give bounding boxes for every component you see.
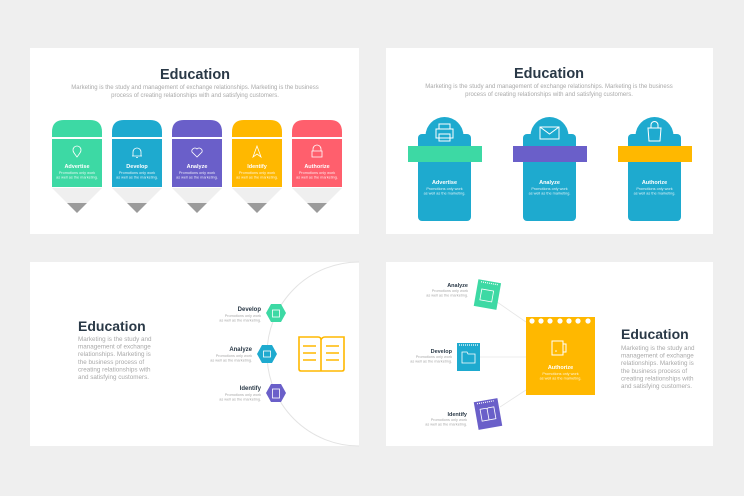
panel: rulers <box>386 48 713 234</box>
paragraph: the business process of <box>621 368 687 375</box>
pencil: Analyze: as well as the marketing. <box>176 176 218 180</box>
pencil: Authorize: Authorize <box>304 164 330 170</box>
column: Authorize <box>618 117 692 221</box>
title: Education <box>78 318 146 334</box>
pencil: Authorize: as well as the marketing. <box>296 176 338 180</box>
pencil: Advertise: Promotions only work <box>59 171 95 175</box>
pencil: Analyze: Analyze <box>187 164 207 170</box>
pencil: Identify: Promotions only work <box>239 171 275 175</box>
item: Analyze <box>210 345 277 363</box>
note: Develop: Develop <box>431 349 453 355</box>
column: Advertise: Promotions only work <box>426 187 463 191</box>
subtitle: Marketing is the study and management of exchange relationships. Marketing is the business <box>71 85 319 91</box>
item: Develop: Develop <box>238 307 261 313</box>
central note: Authorize: Authorize <box>548 365 573 371</box>
column: Advertise <box>408 117 482 221</box>
paragraph: the business process of <box>78 359 144 366</box>
column: Analyze: as well as the marketing. <box>529 192 570 196</box>
subtitle: Marketing is the study and management of exchange relationships. Marketing is the business <box>425 84 673 90</box>
pencil: Develop: Promotions only work <box>119 171 155 175</box>
pencil: Analyze: Promotions only work <box>179 171 215 175</box>
pencil: Authorize: Promotions only work <box>299 171 335 175</box>
paragraph: management of exchange <box>78 344 151 351</box>
paragraph: Marketing is the study and <box>621 345 695 352</box>
column: Authorize: Authorize <box>642 180 667 186</box>
item: Identify: Identify <box>240 386 262 392</box>
panel: notepads <box>386 262 713 446</box>
title: Education <box>160 67 230 83</box>
paragraph: and satisfying customers. <box>78 374 149 381</box>
pencil: Authorize <box>292 120 342 213</box>
pencil: Identify: Identify <box>247 164 268 170</box>
item: Analyze: as well as the marketing. <box>210 359 252 363</box>
item: Develop: as well as the marketing. <box>219 319 261 323</box>
paragraph: relationships. Marketing is <box>621 360 694 367</box>
pencil: Advertise: as well as the marketing. <box>56 176 98 180</box>
pencil: Advertise <box>52 120 102 213</box>
pencil: Develop: as well as the marketing. <box>116 176 158 180</box>
pencil: Develop <box>112 120 162 213</box>
pencil: Develop: Develop <box>126 164 148 170</box>
paragraph: relationships. Marketing is <box>78 351 151 358</box>
title: Education <box>621 326 689 342</box>
icon: open book <box>299 337 344 371</box>
central note: Authorize: Promotions only work <box>542 372 579 376</box>
note: Analyze: Promotions only work <box>432 289 468 293</box>
column: Advertise: Advertise <box>432 180 457 186</box>
note: Identify: as well as the marketing. <box>425 423 467 427</box>
paragraph: creating relationships with <box>78 366 151 373</box>
pencil: Identify <box>232 120 282 213</box>
item: Develop <box>219 304 286 323</box>
panel: pencils <box>30 48 359 234</box>
column: Analyze <box>513 117 587 221</box>
paragraph: and satisfying customers. <box>621 383 692 390</box>
central note: Authorize: as well as the marketing. <box>540 377 581 381</box>
column: Advertise: as well as the marketing. <box>424 192 465 196</box>
note: Develop: Promotions only work <box>416 355 452 359</box>
note: Develop: as well as the marketing. <box>410 360 452 364</box>
central note: Authorize <box>526 317 595 395</box>
item: Analyze: Promotions only work <box>216 354 252 358</box>
subtitle: process of creating relationships with and satisfying customers. <box>111 93 279 99</box>
item: Develop: Promotions only work <box>225 314 261 318</box>
note: Identify: Promotions only work <box>431 418 467 422</box>
item: Analyze: Analyze <box>229 347 253 353</box>
note: Identify: Identify <box>447 412 468 418</box>
column: Authorize: Promotions only work <box>636 187 673 191</box>
note: Identify <box>425 398 502 430</box>
item: Identify <box>219 384 286 402</box>
paragraph: Marketing is the study and <box>78 336 152 343</box>
pencil: Advertise: Advertise <box>64 164 90 170</box>
item: Identify: Promotions only work <box>225 393 261 397</box>
panel: semicircle <box>30 262 359 446</box>
column: Analyze: Analyze <box>539 180 560 186</box>
column: Authorize: as well as the marketing. <box>634 192 675 196</box>
pencil: Identify: as well as the marketing. <box>236 176 278 180</box>
column: Analyze: Promotions only work <box>531 187 568 191</box>
note: Analyze: as well as the marketing. <box>426 294 468 298</box>
pencil: Analyze <box>172 120 222 213</box>
subtitle: process of creating relationships with and satisfying customers. <box>465 92 633 98</box>
paragraph: management of exchange <box>621 353 694 360</box>
title: Education <box>514 66 584 82</box>
paragraph: creating relationships with <box>621 375 694 382</box>
note: Develop <box>410 343 480 371</box>
note: Analyze: Analyze <box>447 283 468 289</box>
note: Analyze <box>426 279 501 310</box>
item: Identify: as well as the marketing. <box>219 398 261 402</box>
